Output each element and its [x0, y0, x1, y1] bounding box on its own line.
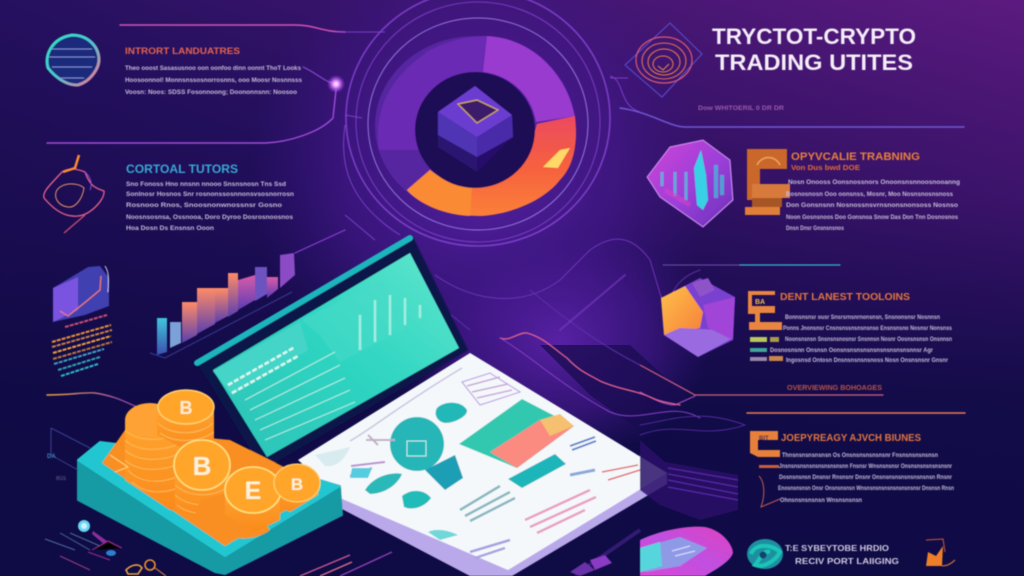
- icon: orange monitor: BIT: [759, 436, 769, 442]
- body text: [778, 452, 954, 504]
- body text: [770, 314, 952, 364]
- bottom left mini data: [45, 520, 166, 576]
- orange tick mark: [759, 476, 780, 507]
- heading: DENT LANEST TOOLOINS: [780, 291, 910, 303]
- colored text rows: [52, 315, 112, 376]
- body text: Enosnsnsnsn Onsr Onsnsnsnsn Wnsnsnsnsnsnsnsnsnsnsr Dnsnsn Rnsn: [778, 485, 954, 492]
- cube: [438, 86, 513, 172]
- tray base: [78, 460, 342, 574]
- body text: Don Gonsnsnn Nosnossnsvrnsnonsnonsoss Nosnso: [786, 202, 958, 209]
- coin right top: [274, 464, 320, 502]
- coin E top: [225, 467, 281, 513]
- body text: Dnsn Dnsr Gnsnsnsnos: [786, 225, 844, 232]
- body text: Bosnosnosn Ooo oonsnss, Mosnr, Moo Nosnsnosnsnoss: [786, 191, 953, 198]
- coin stacks: E: [245, 477, 261, 505]
- body text: Noosnsosnsa, Ossnooa, Doro Dyroo Dosrosnoosnos: [126, 214, 293, 221]
- icon: orange monitor: [745, 149, 790, 215]
- coin B top: [174, 440, 230, 490]
- icon: crystal chart: [647, 140, 733, 227]
- heading: JOEPYREAGY AJVCH BIUNES: [781, 432, 921, 444]
- orange tag: [759, 465, 779, 468]
- body text: Dosnsnsnsn Dnsnsr Rnsnsnr Dnsnr Onsnsnsnsnsnsnsnsnsn Rnsnr: [779, 474, 952, 481]
- icon: orange monitor: [750, 431, 780, 457]
- right ridged dark panel: [570, 440, 738, 576]
- icon: isometric hex cube: [661, 278, 735, 357]
- body text: Thnsnsnsnsnsnsn Os Onsnsnsnsnsnsnr Fnsnsnsnsnsnsn: [782, 452, 938, 459]
- icon: orange monitor: [748, 291, 782, 330]
- subheading: Von Dus bwd DOE: [791, 165, 860, 172]
- central ring diagram: [327, 0, 640, 246]
- small labels: DA: [47, 454, 56, 460]
- coin stacks: B: [291, 475, 303, 494]
- connector lines: [47, 25, 965, 435]
- icon: striped blob: [47, 35, 99, 85]
- bitcoin coin top: [158, 390, 214, 424]
- coin stacks: B: [180, 398, 192, 418]
- body text: [786, 179, 960, 232]
- body text: Hoa Dosn Ds Ensnsn Ooon: [126, 225, 214, 232]
- title line two: TRADING UTITES: [715, 50, 913, 75]
- glow node: [327, 75, 345, 93]
- laptop paper keyboard deck: [340, 353, 667, 576]
- donut: red orange segment: [407, 116, 576, 216]
- section: main title: [625, 23, 916, 112]
- body text: Hoosoonnol! Monnsnssosnorrosnns, ooo Moosr Nosnnsss: [125, 77, 302, 84]
- icon: fingerprint diamond: [625, 23, 702, 97]
- footer text: T:E SYBEYTOBE HRDIO: [785, 543, 889, 553]
- bar chart: [150, 253, 295, 358]
- colored tags: [750, 337, 783, 361]
- laptop: [197, 237, 667, 576]
- heading: INTRORT LANDUATRES: [125, 46, 240, 57]
- bottom strokes under tray: [300, 552, 392, 576]
- bottom right pink device: [640, 527, 733, 576]
- donut: dim purple segment: [378, 36, 487, 150]
- donut hole: [415, 72, 535, 188]
- crypto coin tray: [78, 390, 342, 574]
- footer text line two: RECIV PORT LAIIGING: [795, 556, 899, 566]
- left small wireframe: [51, 428, 90, 470]
- icon: orange line bag: [44, 155, 104, 233]
- icon: orange flame card: [926, 539, 955, 566]
- icon: teal swirl: [747, 539, 783, 569]
- body text: Theo ooost Sasasusnoo oon oonfoo dinn oonnt ThoT Looks: [125, 65, 301, 72]
- section: tutors: [44, 155, 294, 233]
- body text: [126, 181, 294, 232]
- body text: Dosnosnsnn Onsnsn Oonsnsnsnsnsnsnsnsnsnsnsnnsr Agr: [770, 347, 933, 354]
- body text: Bonnsnsnsr ousr Snsrsrnsnrnonsnsn, Snsnonsnsr Nosnnsn: [785, 314, 940, 321]
- laptop screen: [213, 253, 459, 457]
- body text: Noonsnsnsn Snsnsnsnosnsr Snsnnsn Nosnr Oosnsnsnsn Onsnnsn: [785, 336, 952, 343]
- small labels: 8GS: [56, 476, 67, 482]
- icon: orange monitor: BA: [755, 299, 765, 306]
- coin stacks: [110, 390, 320, 538]
- subtitle: Dow WHITOERIL 0 DR DR: [698, 105, 784, 112]
- body text: Ingosnsd Ontosn Dnsnsnsnsnsnoss Nosn Onsnsnsnr Gnsnr: [786, 357, 948, 364]
- body text: [125, 65, 302, 96]
- section: intro: [47, 35, 302, 96]
- body text: Sonlnosr Hosnos Snr rosnonssosnnonsvsosnorrosn: [126, 191, 294, 198]
- heading: CORTOAL TUTORS: [126, 162, 238, 176]
- coin stacks: B: [193, 451, 211, 481]
- deck illustrations: [315, 368, 640, 558]
- body text: Nosn Onooss Oonsnossnors Onoonsnsnnoosnooanng: [788, 179, 960, 186]
- donut: magenta segment: [483, 36, 575, 122]
- body text: Noon Gosnsnoos Doo Gonsnoa Snow Das Don Tnn Dosnosnos: [786, 214, 958, 221]
- section: joepyreagy: [750, 431, 954, 507]
- body text: Ohnsnsnsnsnsn Wnsnsnsnsn: [780, 497, 862, 504]
- section: opyvcalie trabning: [647, 140, 960, 232]
- small labels: [47, 454, 67, 482]
- laptop lid: [197, 237, 468, 470]
- section: dent lanest tooloins: [661, 278, 952, 392]
- body text: Ponns Jnonsnsr Cnsnsnssnsnsnsnso Ensnsnsno Nosnsr Nonsnss: [783, 325, 952, 332]
- heading: OPYVCALIE TRABNING: [791, 151, 920, 163]
- title: TRYCTOT-CRYPTO: [712, 24, 916, 49]
- caption: OVERVIEWING BOHOAGES: [787, 385, 882, 392]
- body text: Sno Fonoss Hno nnsnn nnooo Snsnsnosn Tns Ssd: [126, 181, 286, 188]
- body text: Jnsnsnsnsnsnsnsnsnsnsnn Fnsnsr Wnsnsnsnsr Onsnsnsnsnsnsnsnr: [779, 463, 952, 470]
- body text: Voosn: Noos: SDSS Fosonnoong; Doononnsnn: Noosoo: [125, 89, 297, 96]
- small chart card: [52, 266, 112, 376]
- footer logo group: [747, 539, 955, 569]
- donut base: [375, 36, 575, 216]
- body text: Rosnooo Rnos, Snoosnonwnossnsr Gosno: [126, 202, 282, 209]
